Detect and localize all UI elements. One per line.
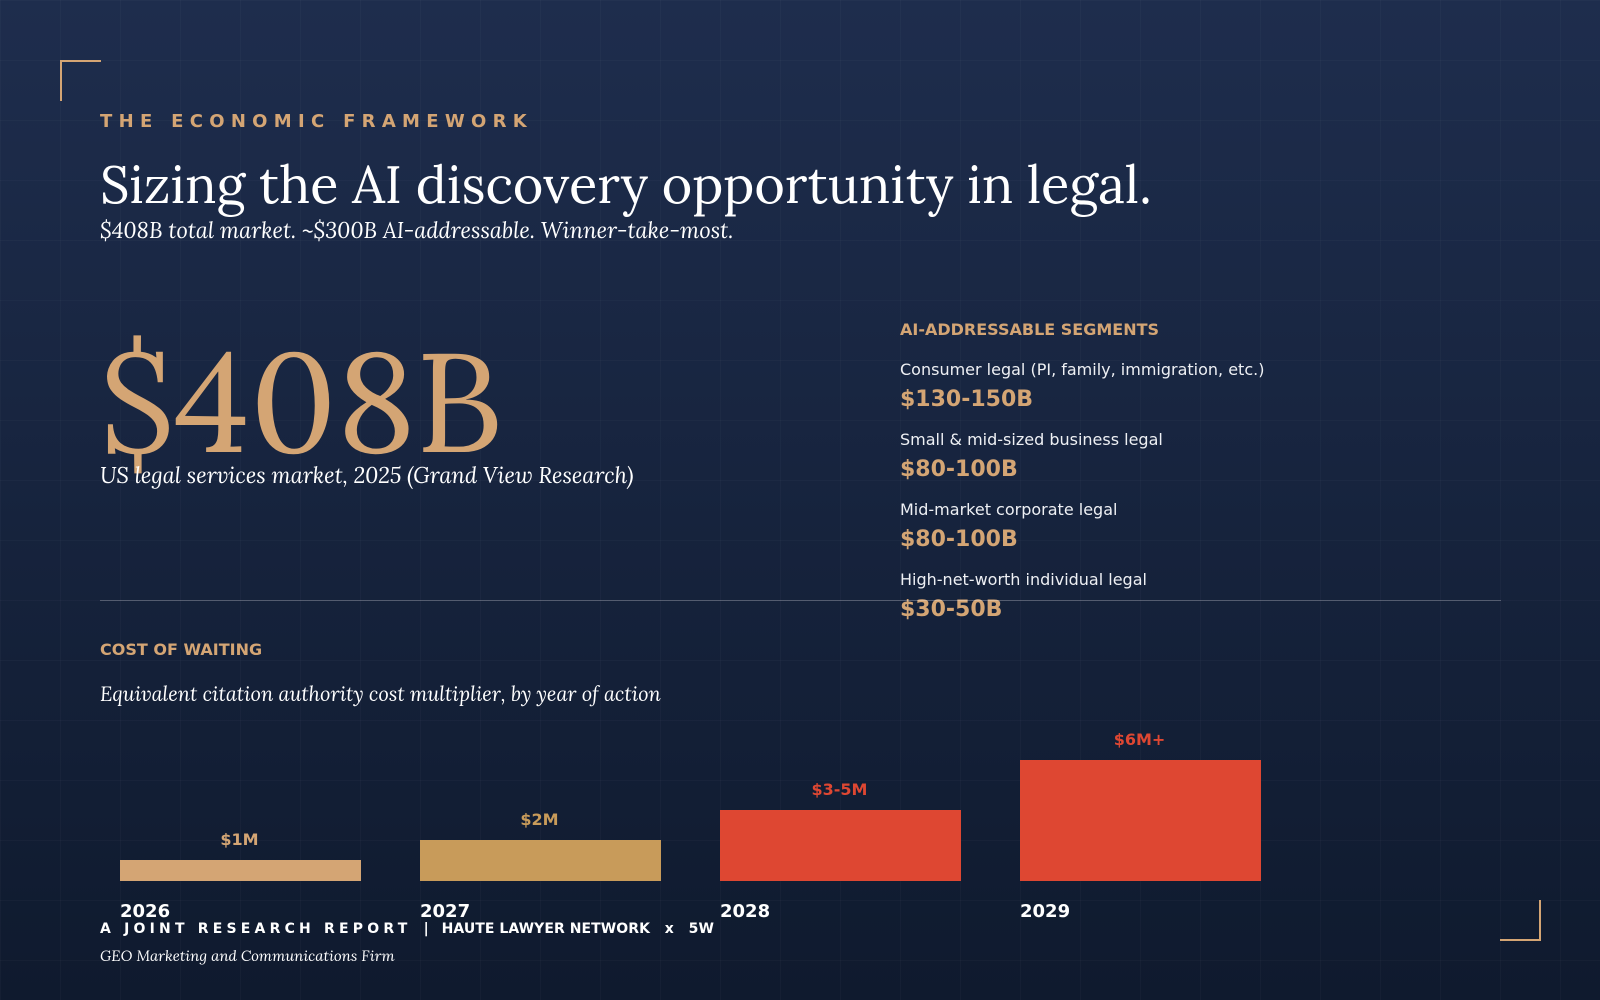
segment label: small business: Small & mid-sized business legal — [900, 430, 1163, 449]
eyebrow label: THE ECONOMIC FRAMEWORK — [100, 111, 533, 132]
segment value: mid-market: $80-100B — [900, 527, 1018, 552]
segments heading: AI-ADDRESSABLE SEGMENTS — [900, 320, 1159, 339]
bar 2027: 2027 — [420, 901, 470, 922]
bar 2029: 2029 — [1020, 901, 1070, 922]
big number caption: US legal services market, 2025 (Grand View Research) — [100, 462, 634, 490]
segment value: consumer: $130-150B — [900, 387, 1033, 412]
segment value: high-net-worth: $30-50B — [900, 597, 1002, 622]
segment value: small business: $80-100B — [900, 457, 1018, 482]
section subtitle: Equivalent citation authority cost multiplier, by year of action — [100, 682, 661, 707]
bar 2027: $2M — [520, 810, 559, 829]
bar 2028: $3-5M — [812, 780, 867, 799]
segment label: consumer: Consumer legal (PI, family, immigration, etc.) — [900, 360, 1264, 379]
bar 2026: $1M — [220, 830, 259, 849]
footer subline: GEO Marketing and Communications Firm — [100, 947, 395, 966]
bar 2029: $6M+ — [1114, 730, 1165, 749]
segment label: high-net-worth: High-net-worth individual legal — [900, 570, 1147, 589]
bar 2026 — [120, 830, 361, 922]
panel: AI-addressable segments — [900, 320, 1264, 622]
subtitle: $408B total market. ~$300B AI-addressable. Winner-take-most. — [100, 217, 733, 245]
bar 2027 — [420, 810, 661, 922]
bar 2026: 2026 — [120, 901, 170, 922]
footer line: A JOINT RESEARCH REPORT | HAUTE LAWYER NETWORK x 5W — [100, 921, 714, 937]
section heading: cost of waiting: COST OF WAITING — [100, 640, 262, 659]
corner bracket: top left — [60, 60, 101, 101]
bar chart — [120, 730, 1261, 922]
bar 2028 — [720, 780, 961, 922]
bar 2029 — [1020, 730, 1261, 922]
big number: $408B — [100, 312, 503, 491]
corner bracket: bottom right — [1500, 900, 1541, 941]
title: Sizing the AI discovery opportunity in legal. — [100, 152, 1152, 218]
bar 2028: 2028 — [720, 901, 770, 922]
segment label: mid-market: Mid-market corporate legal — [900, 500, 1117, 519]
